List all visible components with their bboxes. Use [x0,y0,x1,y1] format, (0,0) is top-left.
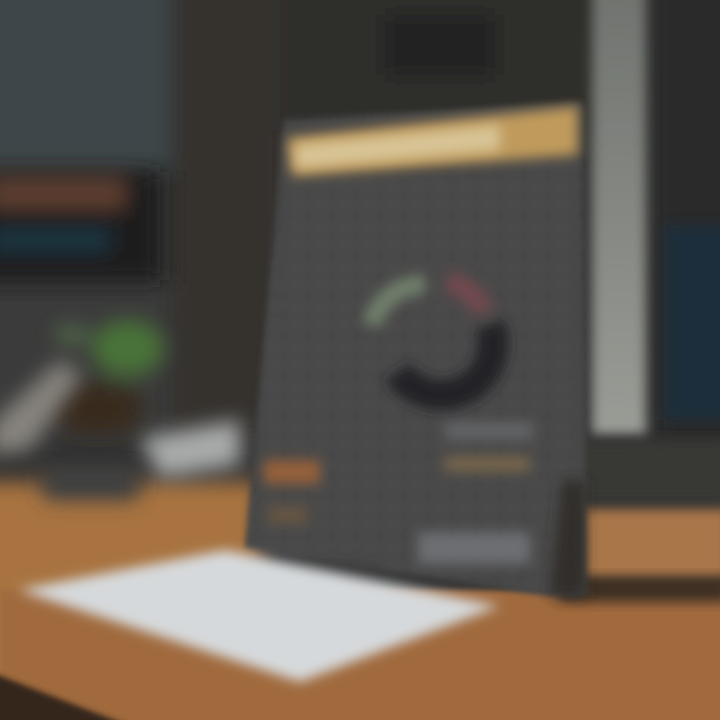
board surface [245,102,586,596]
donut chart [372,282,493,395]
orange block bottom left of board [264,460,320,524]
header band highlight [296,125,500,168]
board side shadow [550,480,586,597]
header band [287,106,578,176]
text block right [418,422,533,564]
light column [592,0,646,435]
infographic board [245,102,586,597]
white paper on desk [18,550,500,682]
plant [52,320,164,434]
board mottled print texture [250,160,584,590]
window panel right [664,225,720,420]
wooden desk [0,440,720,720]
white object left [140,420,240,478]
monitor left [0,172,160,280]
dark gap under desk [0,668,140,720]
white figurine and dark base [0,360,140,500]
